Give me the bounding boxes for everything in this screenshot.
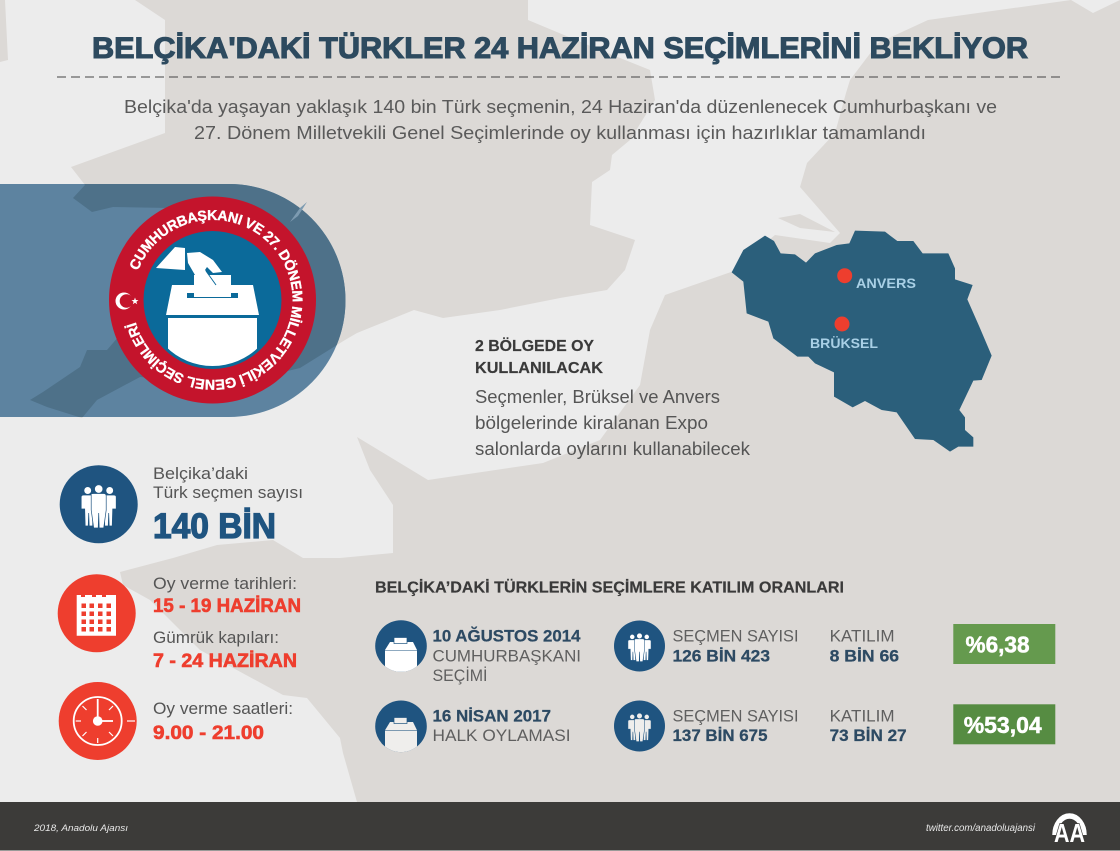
- election name: CUMHURBAŞKANI: [432, 648, 581, 666]
- logo: Anadolu Agency: AA: [1054, 818, 1085, 848]
- icon: crescent and star: [116, 292, 138, 310]
- election name: [432, 708, 570, 745]
- election name: [432, 627, 581, 685]
- stat: voting hours: Oy verme saatleri:: [153, 699, 293, 718]
- row: 10 August 2014: [375, 620, 1055, 685]
- stat: voter count: Belçika’daki: [153, 464, 248, 483]
- text block: voting regions: bölgelerinde kiralanan Expo: [475, 413, 708, 433]
- stat: voter count: Türk seçmen sayısı: [153, 483, 303, 502]
- footer: [0, 802, 1120, 851]
- election name: 16 NİSAN 2017: [432, 708, 551, 726]
- icon: ballot box: [375, 700, 427, 755]
- voter count: 126 BİN 423: [672, 648, 770, 666]
- turnout count: [830, 708, 907, 745]
- icon: voters: [60, 465, 138, 543]
- turnout count: 8 BİN 66: [830, 648, 899, 666]
- turnout count: KATILIM: [830, 708, 895, 726]
- voter count: [672, 628, 798, 666]
- stat: voting and customs dates: Oy verme tarihleri:: [153, 574, 297, 593]
- stat: voting hours: 9.00 - 21.00: [153, 723, 264, 744]
- turnout percentage: %53,04: [964, 712, 1042, 738]
- stat: voter count: [153, 464, 303, 546]
- voter count: 137 BİN 675: [672, 727, 768, 745]
- stat: voting and customs dates: Gümrük kapıları:: [153, 628, 279, 647]
- voter count: SEÇMEN SAYISI: [672, 628, 798, 646]
- text block: voting regions: KULLANILACAK: [475, 360, 604, 377]
- map of Belgium: BRÜKSEL: [810, 335, 878, 351]
- turnout count: 73 BİN 27: [830, 727, 907, 745]
- text block: voting regions: Seçmenler, Brüksel ve Anvers: [475, 387, 720, 407]
- stat: voting and customs dates: [153, 574, 301, 672]
- election name: SEÇİMİ: [432, 666, 488, 685]
- panel: election badge banner: [0, 184, 346, 417]
- badge: red ring with ballot box: [109, 196, 316, 404]
- stat: voting hours: [153, 699, 293, 744]
- copyright: 2018, Anadolu Ajansı: [33, 823, 128, 834]
- turnout count: KATILIM: [830, 628, 895, 646]
- social handle: twitter.com/anadoluajansi: [926, 823, 1036, 834]
- turnout percentage: [953, 704, 1055, 744]
- icon: voters: [614, 700, 665, 752]
- voter count: SEÇMEN SAYISI: [672, 708, 798, 726]
- subtitle: Belçika'da yaşayan yaklaşık 140 bin Türk seçmenin, 24 Haziran'da düzenlenecek Cumhurbaşkanı ve: [124, 96, 997, 117]
- turnout count: [830, 628, 899, 666]
- heading: turnout rates: BELÇİKA’DAKİ TÜRKLERİN SEÇİMLERE KATILIM ORANLARI: [375, 580, 844, 596]
- subtitle: [124, 96, 997, 143]
- stat: voting and customs dates: 7 - 24 HAZİRAN: [153, 651, 297, 672]
- map of Belgium: [732, 231, 992, 452]
- subtitle: 27. Dönem Milletvekili Genel Seçimlerinde oy kullanması için hazırlıklar tamamlandı: [194, 122, 926, 143]
- turnout percentage: %6,38: [966, 632, 1030, 658]
- icon: calendar: [58, 574, 136, 652]
- map of Belgium: ANVERS: [856, 275, 916, 291]
- text block: voting regions: 2 BÖLGEDE OY: [475, 338, 595, 355]
- stat: voting and customs dates: 15 - 19 HAZİRAN: [153, 596, 301, 617]
- title: BELÇİKA'DAKİ TÜRKLER 24 HAZİRAN SEÇİMLERİNİ BEKLİYOR: [92, 32, 1028, 65]
- ring text: CUMHURBAŞKANI VE 27. DÖNEM MİLLETVEKİLİ GENEL SEÇİMLERİ: [124, 210, 303, 390]
- voter count: [672, 708, 798, 745]
- stat: voter count: 140 BİN: [153, 507, 276, 546]
- icon: ballot box: [375, 620, 427, 674]
- election name: 10 AĞUSTOS 2014: [432, 627, 581, 646]
- text block: voting regions: [475, 338, 751, 459]
- election name: HALK OYLAMASI: [432, 727, 570, 745]
- text block: voting regions: salonlarda oylarını kullanabilecek: [475, 439, 751, 459]
- icon: ballot box and hand: [156, 247, 259, 370]
- icon: voters: [614, 620, 665, 672]
- turnout percentage: [953, 624, 1055, 664]
- row: 16 April 2017: [375, 700, 1055, 755]
- icon: clock: [59, 682, 137, 760]
